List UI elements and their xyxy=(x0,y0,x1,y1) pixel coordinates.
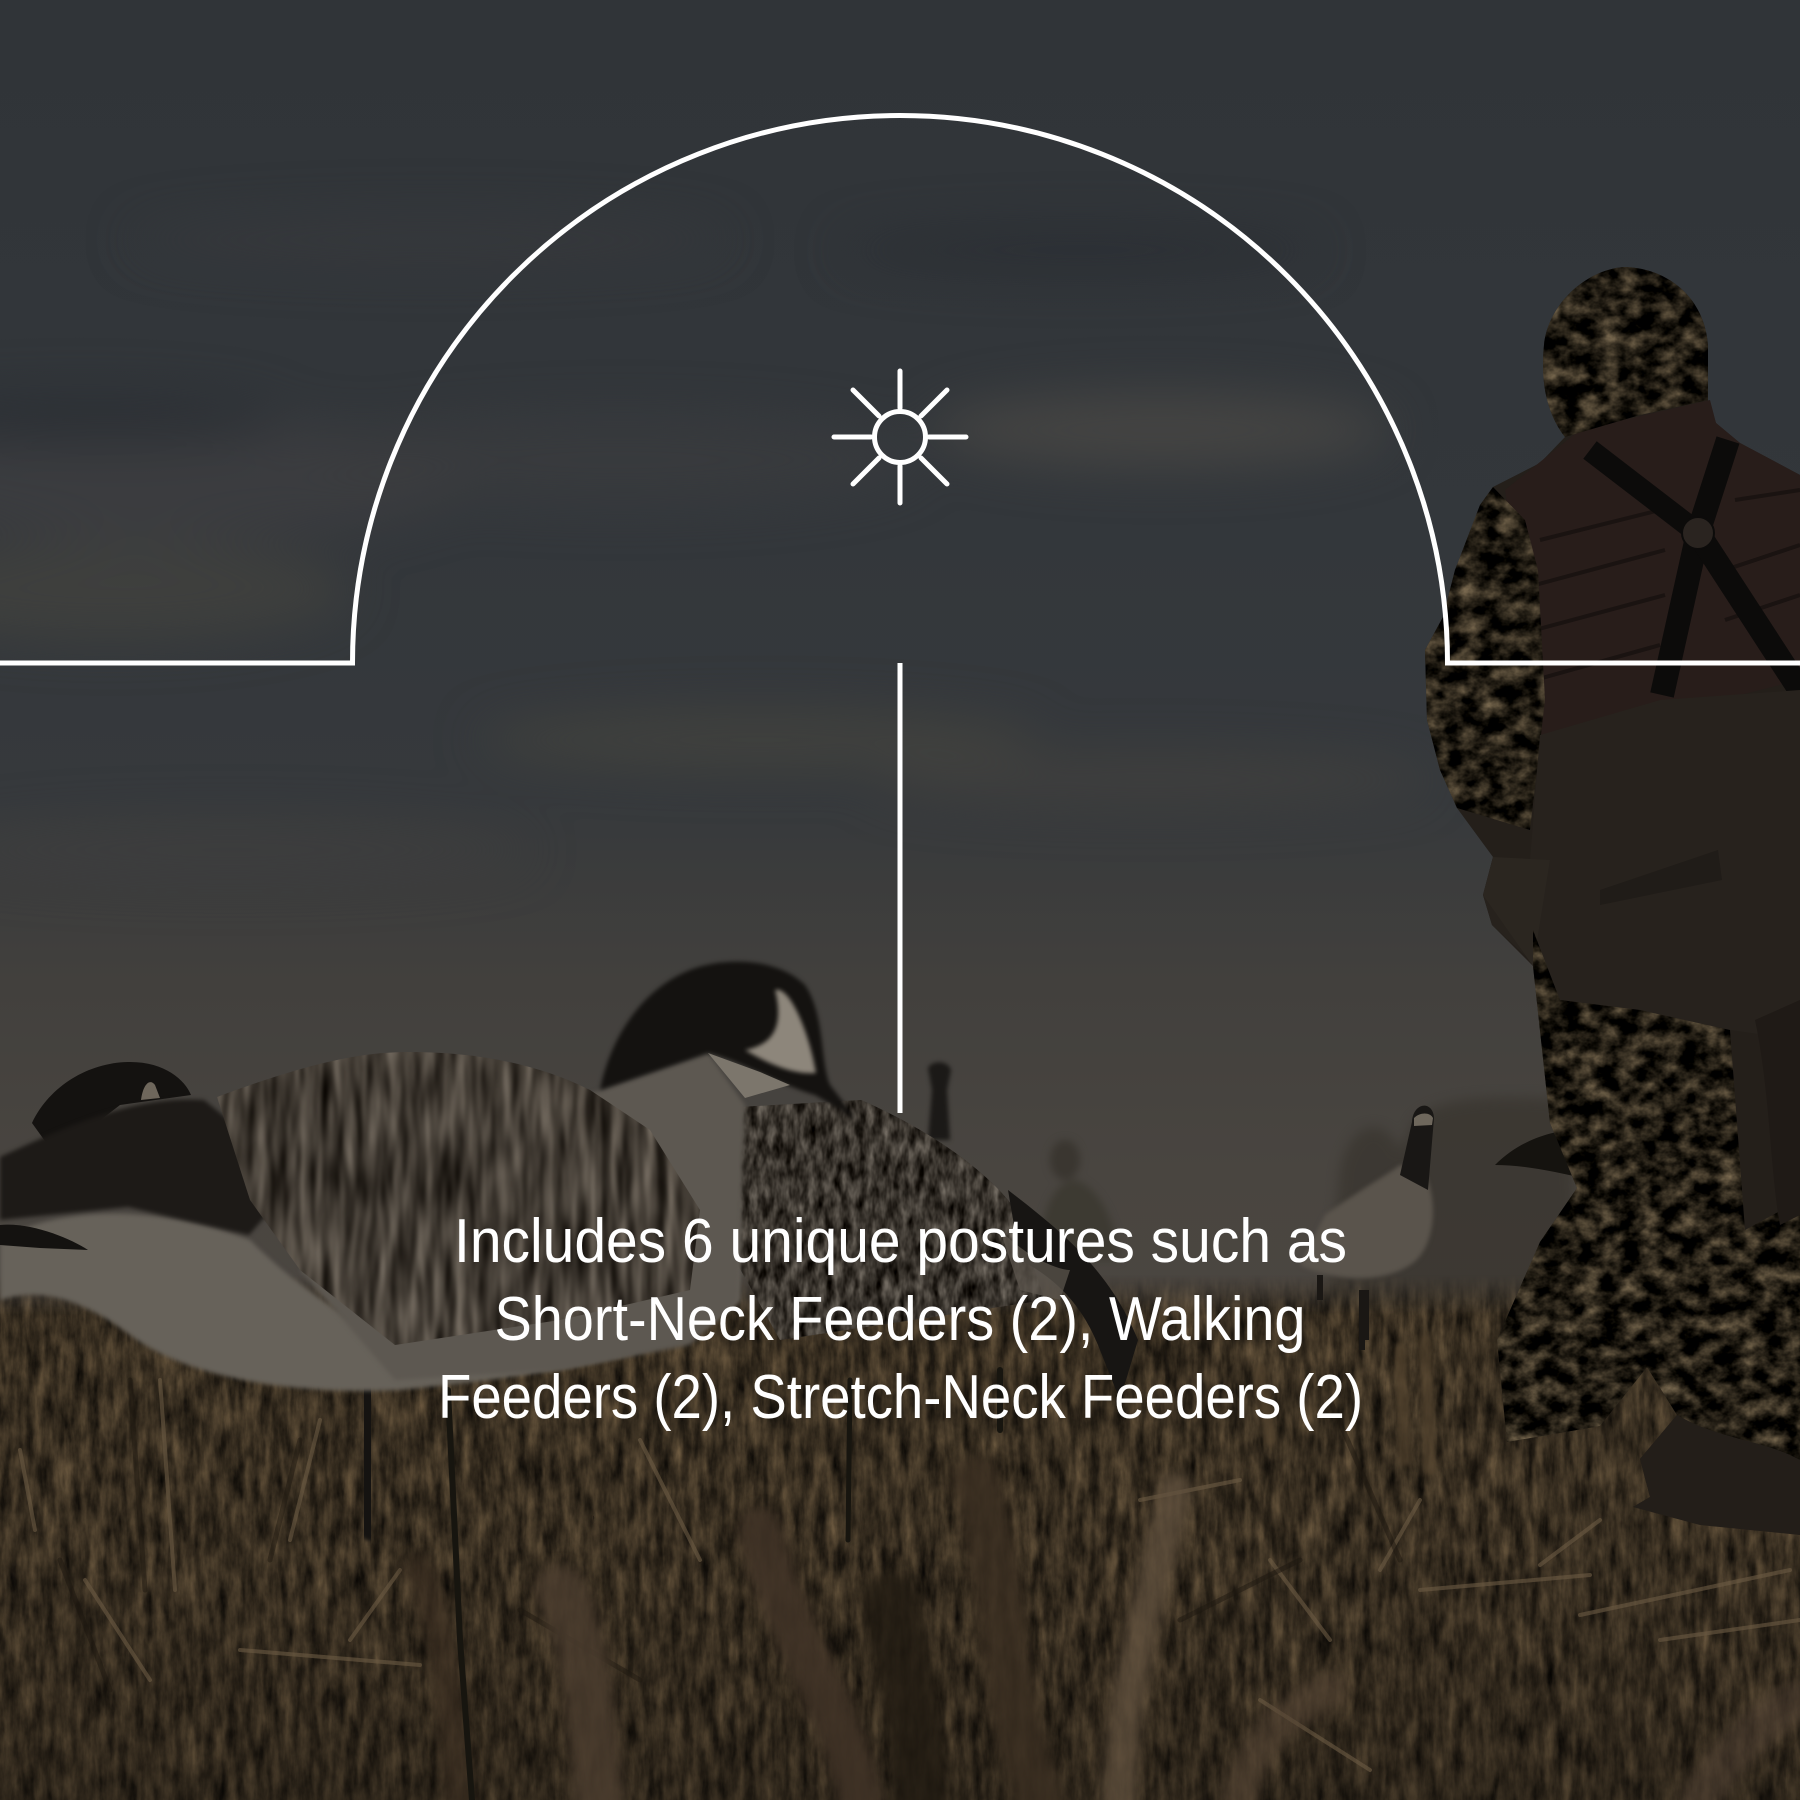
decoy stakes xyxy=(365,1370,1000,1800)
goose black head and neck xyxy=(600,962,857,1120)
caption text: Short-Neck Feeders (2), Walking xyxy=(494,1285,1306,1354)
scattered corn stalks xyxy=(20,1340,1800,1770)
goose white belly xyxy=(0,1180,740,1391)
goose feathered wing xyxy=(217,1052,700,1345)
icon: sun xyxy=(834,371,966,503)
hunter rear leg shadow xyxy=(1755,1000,1800,1225)
goose decoy: rear scaly body xyxy=(740,1100,1138,1393)
hunter camo sleeve hem xyxy=(1483,857,1550,966)
distant hunter xyxy=(1040,1140,1120,1260)
hunter suspenders xyxy=(1590,440,1800,695)
vertical connector line xyxy=(898,663,902,1113)
goose dark wing tail xyxy=(0,1100,300,1235)
goose decoy: rear head arc xyxy=(32,1062,191,1155)
hunter boot xyxy=(1633,1415,1800,1535)
caption text: Includes 6 unique postures such as xyxy=(454,1207,1347,1276)
distant decoy post xyxy=(928,1062,951,1140)
caption text: Feeders (2), Stretch-Neck Feeders (2) xyxy=(438,1363,1363,1432)
black tail behind hunter xyxy=(1495,1130,1590,1180)
hunter camo legs xyxy=(1497,930,1800,1460)
hunter body silhouette xyxy=(1425,267,1800,1535)
caption text xyxy=(438,1207,1363,1432)
blurred foreground stalks xyxy=(420,1480,1800,1800)
hunter hood xyxy=(1543,267,1708,437)
suspender button xyxy=(1682,517,1714,549)
hunter xyxy=(1420,260,1800,1535)
goose decoy: front body xyxy=(0,962,857,1391)
background trees xyxy=(1325,1097,1580,1320)
sky xyxy=(0,0,1800,1330)
distant standing goose decoy xyxy=(1300,1106,1434,1350)
semicircle outline with side rules xyxy=(0,115,1800,663)
hunter sleeve xyxy=(1425,487,1545,830)
goose white chest xyxy=(300,1053,745,1380)
hunter vest xyxy=(1505,400,1800,735)
hunter waders xyxy=(1483,690,1800,1040)
stubble field xyxy=(0,1270,1800,1800)
